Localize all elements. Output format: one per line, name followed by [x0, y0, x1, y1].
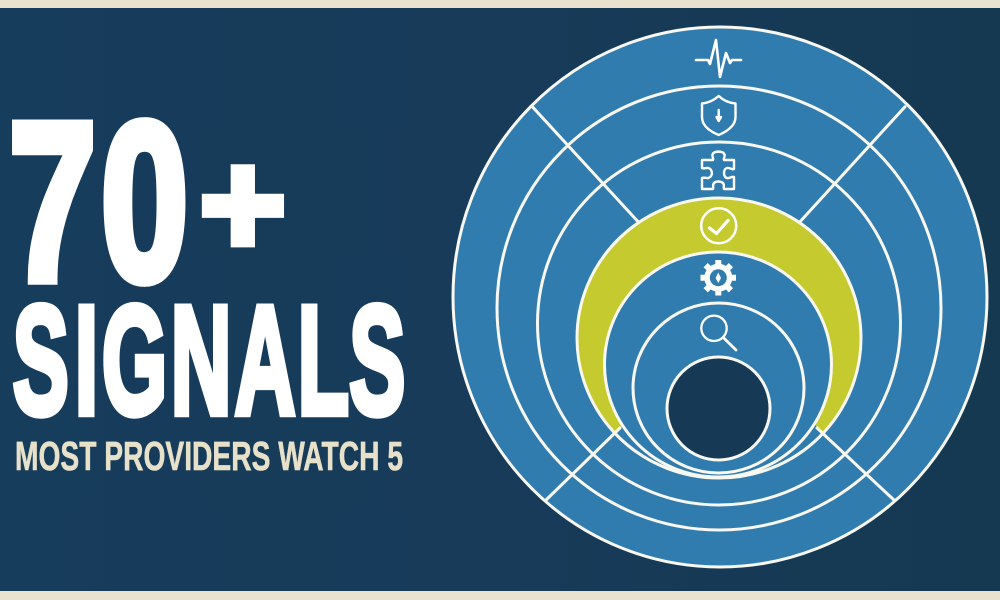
subheading: MOST PROVIDERS WATCH 5: [15, 433, 403, 479]
headline: 70+: +: [200, 122, 286, 287]
icon: shield: [702, 96, 736, 135]
icon: pulse: [696, 40, 741, 77]
icon: magnifier: [701, 316, 736, 350]
ring outlines: [497, 86, 941, 530]
headline: 70+: [9, 77, 286, 328]
outer ring: [453, 27, 987, 567]
segment dividers: [532, 107, 905, 500]
icon: puzzle piece: [702, 152, 734, 189]
icon: check circle: [701, 208, 736, 243]
headline: 70+: 70: [9, 77, 188, 328]
centre hole: [667, 357, 770, 460]
icon: gear: [700, 260, 736, 296]
highlighted yellow ring: [578, 200, 860, 432]
concentric signal rings diagram: [453, 27, 987, 567]
headline: SIGNALS: SIGNALS: [13, 274, 405, 447]
